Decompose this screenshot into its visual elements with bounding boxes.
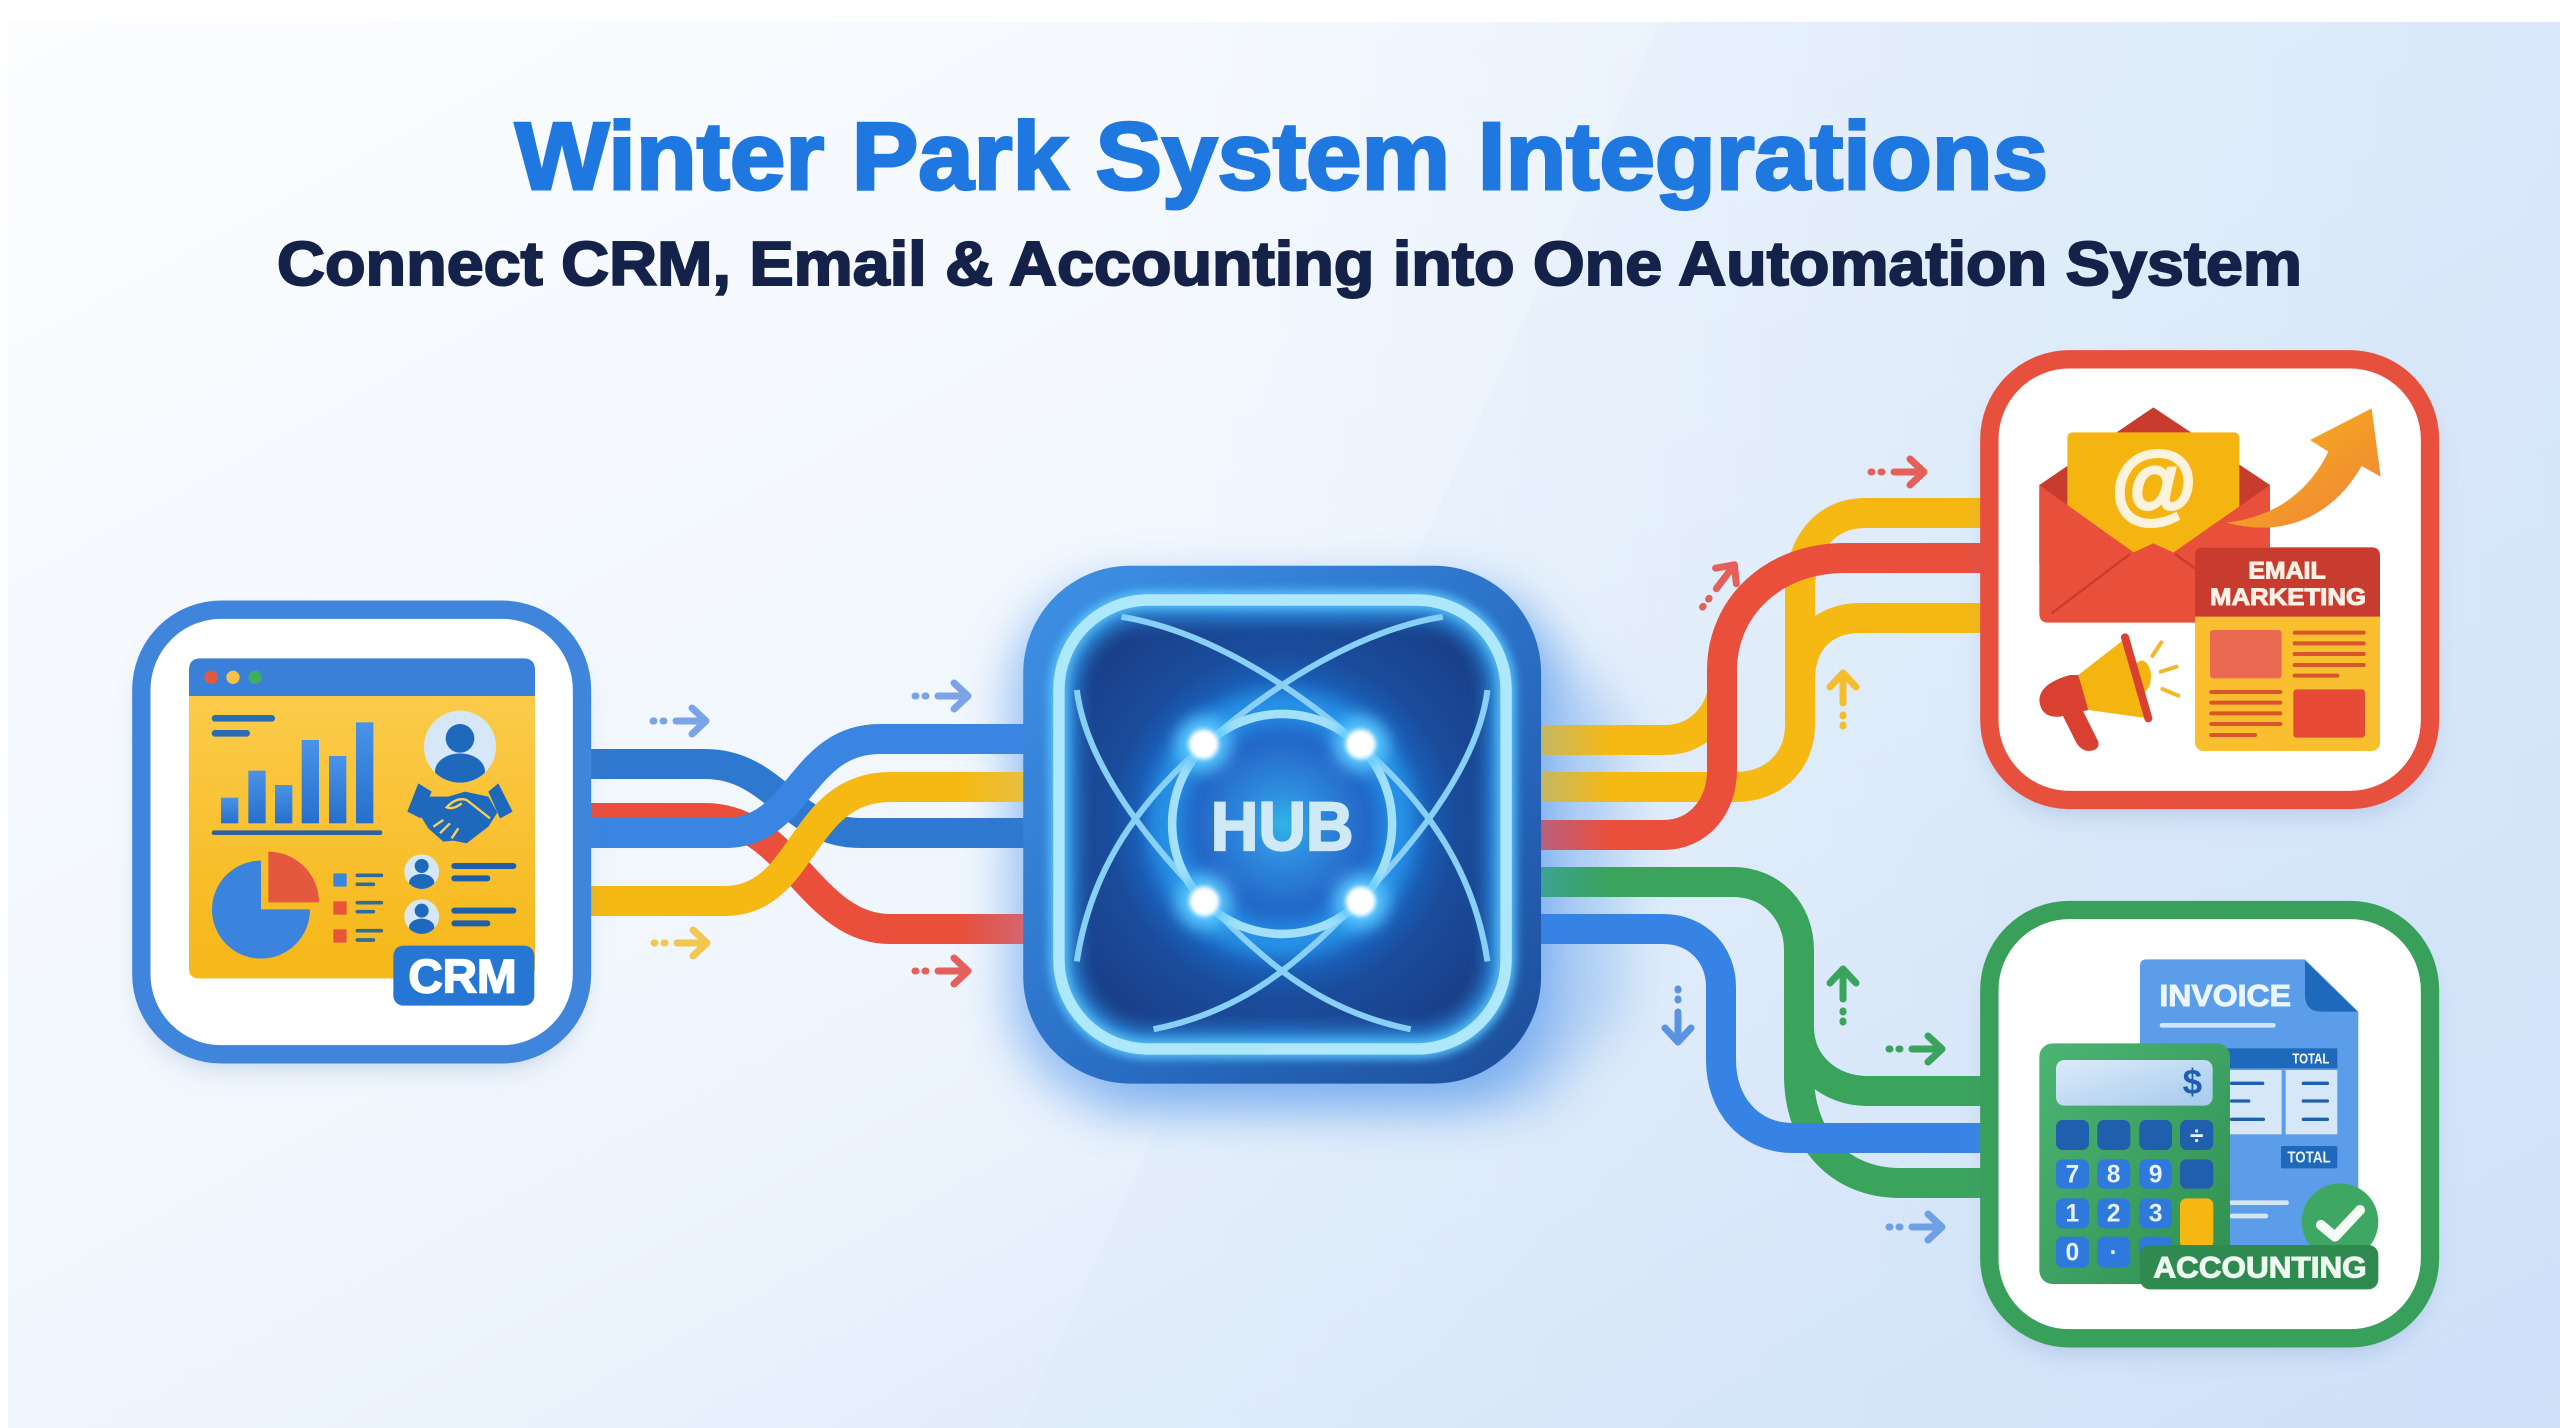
accounting card frame bbox=[1989, 910, 2430, 1338]
connectors: CRM to hub bbox=[585, 739, 1030, 929]
bar chart bbox=[214, 718, 380, 833]
pipe: blue upper bbox=[585, 764, 1030, 833]
email card frame bbox=[1989, 359, 2430, 800]
panel: central hub bbox=[1023, 566, 1541, 1084]
hub glow and shadow bbox=[1010, 585, 1625, 1110]
accounting label: ACCOUNTING bbox=[2153, 1251, 2367, 1284]
flow arrows bbox=[653, 459, 1942, 1240]
icon: calculator: 0 bbox=[2065, 1240, 2079, 1267]
arrow: green up bbox=[1830, 969, 1856, 1022]
pipe: yellow middle bbox=[1541, 618, 1990, 787]
icon: calculator: 3 bbox=[2149, 1201, 2163, 1228]
icon: calculator: 7 bbox=[2065, 1161, 2079, 1188]
hub orbit lines bbox=[1077, 617, 1487, 1029]
CRM card frame bbox=[141, 610, 582, 1054]
pipe: yellow bbox=[585, 787, 1030, 901]
arrow: hub input red bbox=[915, 958, 968, 984]
arrow: yellow up bbox=[1830, 673, 1856, 726]
pipe: red bbox=[1541, 558, 1990, 835]
newsletter: EMAIL bbox=[2248, 557, 2326, 584]
pipe: blue bbox=[1541, 929, 1990, 1138]
icon: invoice bbox=[2140, 959, 2358, 1257]
hub glowing ring bbox=[1059, 600, 1506, 1049]
arrow: CRM yellow bbox=[654, 930, 707, 956]
pipe: green upper bbox=[1541, 882, 1990, 1091]
arrow: diagonal red bbox=[1692, 557, 1745, 615]
connectors: hub to email bbox=[1541, 513, 1990, 835]
arrow: email red bbox=[1871, 459, 1924, 485]
icon: calculator: 1 bbox=[2065, 1201, 2079, 1228]
icon: calculator: $ bbox=[2183, 1063, 2202, 1102]
icon: contact and handshake bbox=[407, 711, 513, 843]
arrow: green right bbox=[1889, 1036, 1942, 1062]
icon: calculator bbox=[2039, 1043, 2230, 1284]
icon: envelope bbox=[2039, 407, 2270, 623]
panel: email marketing bbox=[1989, 359, 2430, 813]
icon: envelope: @ bbox=[2111, 434, 2197, 532]
icon: megaphone bbox=[2039, 637, 2178, 751]
arrow: blue right bbox=[1889, 1214, 1942, 1240]
title: Winter Park System Integrations bbox=[515, 103, 2048, 210]
pipe: yellow top bbox=[1800, 513, 1990, 680]
contact list bbox=[404, 854, 513, 936]
CRM dashboard window bbox=[189, 658, 535, 978]
icon: calculator: ÷ bbox=[2190, 1123, 2203, 1150]
pipe: red bbox=[585, 818, 1030, 929]
hub inner field bbox=[1059, 600, 1506, 1049]
pipe: yellow lower bbox=[1541, 695, 1722, 740]
icon: invoice: INVOICE bbox=[2159, 979, 2291, 1013]
pie chart and legend bbox=[212, 852, 381, 959]
arrow: CRM blue bbox=[653, 708, 706, 734]
hub nodes bbox=[1177, 717, 1387, 928]
icon: calculator: 9 bbox=[2149, 1161, 2163, 1188]
CRM label bbox=[393, 946, 534, 1006]
icon: calculator: 8 bbox=[2107, 1161, 2121, 1188]
icon: check badge bbox=[2302, 1183, 2378, 1260]
subtitle: Connect CRM, Email & Accounting into One Automation System bbox=[277, 230, 2302, 299]
panel: CRM bbox=[141, 610, 582, 1067]
accounting label bbox=[2140, 1245, 2378, 1289]
pipe: green lower bbox=[1799, 1030, 1990, 1183]
icon: calculator: · bbox=[2110, 1240, 2118, 1267]
icon: calculator: 2 bbox=[2107, 1201, 2121, 1228]
icon: invoice: TOTAL bbox=[2292, 1051, 2329, 1067]
CRM label: CRM bbox=[408, 951, 517, 1004]
arrow: hub input blue bbox=[915, 683, 968, 709]
hub label: HUB bbox=[1211, 788, 1354, 865]
icon: invoice: TOTAL bbox=[2287, 1150, 2331, 1167]
connectors: hub to accounting bbox=[1541, 882, 1990, 1183]
icon: growth arrow bbox=[2227, 408, 2381, 528]
newsletter: MARKETING bbox=[2210, 584, 2366, 611]
arrow: blue down bbox=[1665, 989, 1691, 1042]
newsletter bbox=[2195, 547, 2380, 751]
panel: accounting bbox=[1989, 910, 2430, 1352]
pipe: blue lower bbox=[585, 739, 1030, 833]
